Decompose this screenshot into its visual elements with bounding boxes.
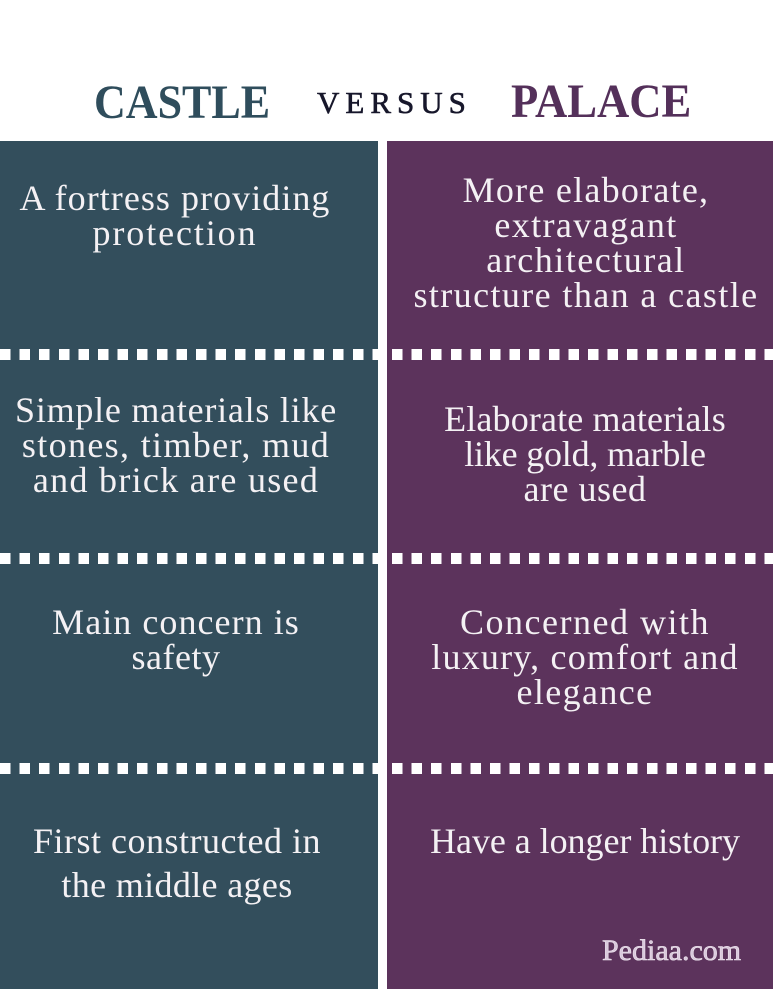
title: castle: CASTLE bbox=[94, 76, 270, 129]
text: castle row 3: Main concern is bbox=[52, 602, 300, 642]
dotted divider 2 bbox=[0, 553, 773, 564]
text: palace row 2: Elaborate materials bbox=[444, 399, 726, 439]
text: castle row 2: Simple materials like bbox=[15, 390, 337, 430]
text: palace row 1: More elaborate, bbox=[463, 170, 709, 210]
text: castle row 4: First constructed in bbox=[33, 821, 321, 861]
text: castle row 1: A fortress providing bbox=[20, 178, 330, 218]
text: palace row 1: structure than a castle bbox=[413, 275, 759, 315]
logo: Pediaa.com: Pediaa.com bbox=[602, 934, 741, 967]
title: versus: VERSUS bbox=[317, 85, 472, 120]
panel: palace column bbox=[387, 141, 773, 989]
text: castle row 4: the middle ages bbox=[61, 865, 293, 905]
text: palace row 4: Have a longer history bbox=[430, 821, 740, 861]
title: palace: PALACE bbox=[511, 75, 691, 128]
dotted divider 3 bbox=[0, 763, 773, 774]
text: castle row 2 bbox=[15, 390, 337, 500]
text: palace row 3: luxury, comfort and bbox=[431, 637, 739, 677]
text: castle row 1: protection bbox=[93, 213, 257, 253]
dotted divider 1 bbox=[0, 349, 773, 360]
text: palace row 3: elegance bbox=[516, 672, 654, 712]
text: castle row 3 bbox=[52, 602, 300, 677]
text: palace row 2: are used bbox=[524, 469, 646, 509]
panel: castle column bbox=[0, 141, 378, 989]
text: palace row 1: extravagant bbox=[494, 205, 678, 245]
text: castle row 2: and brick are used bbox=[33, 460, 319, 500]
text: castle row 3: safety bbox=[132, 637, 220, 677]
text: palace row 3: Concerned with bbox=[460, 602, 710, 642]
text: palace row 2 bbox=[444, 399, 726, 509]
text: castle row 2: stones, timber, mud bbox=[22, 425, 330, 465]
text: palace row 1: architectural bbox=[486, 240, 686, 280]
text: castle row 4 bbox=[33, 821, 321, 905]
text: palace row 2: like gold, marble bbox=[464, 434, 706, 474]
text: castle row 1 bbox=[20, 178, 330, 253]
text: palace row 1 bbox=[413, 170, 759, 315]
text: palace row 3 bbox=[431, 602, 739, 712]
